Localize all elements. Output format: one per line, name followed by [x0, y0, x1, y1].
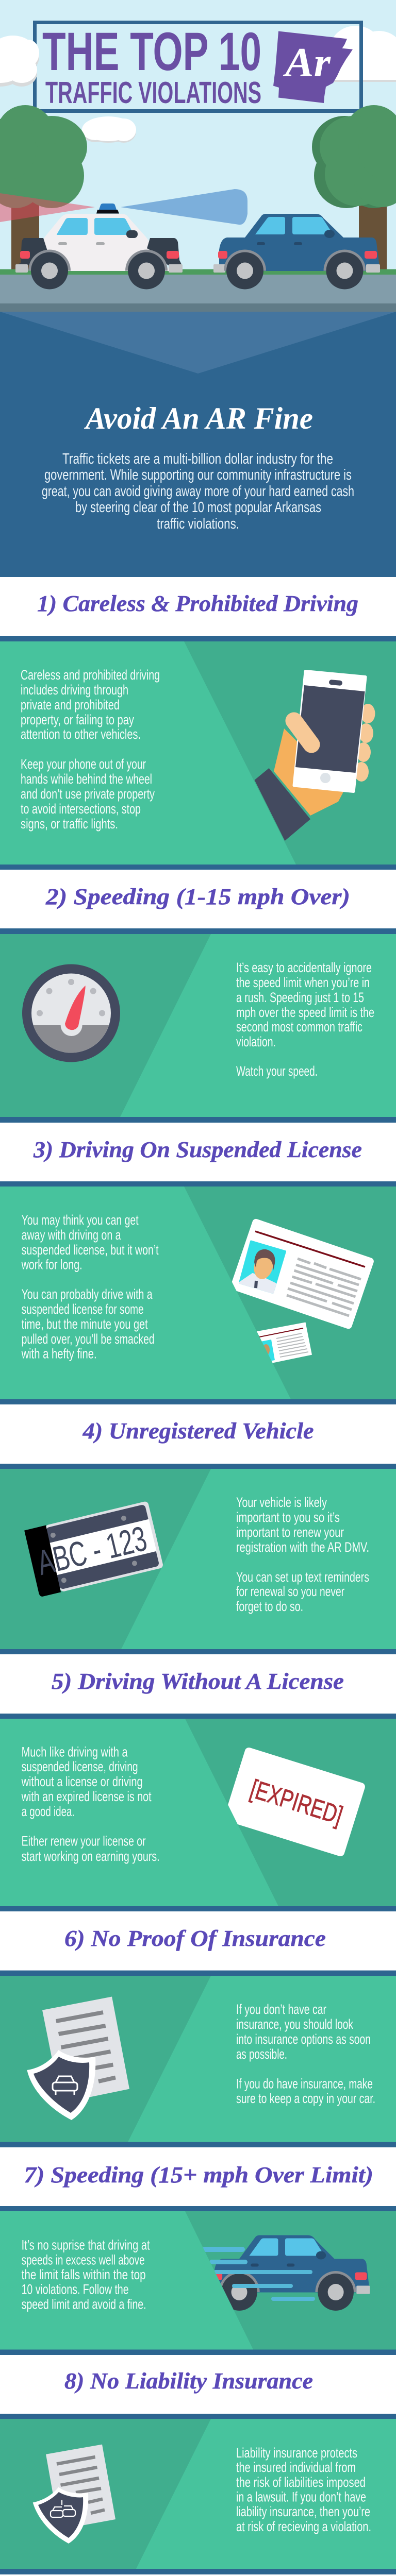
text: violation 5 description	[21, 1744, 160, 1864]
text: violation 5 description: without a license or driving	[21, 1774, 143, 1789]
speed lines	[202, 2247, 315, 2301]
intro heading: Avoid An AR Fine	[84, 401, 313, 435]
text: violation 7 description: the limit falls within the top	[22, 2267, 146, 2282]
cloud: left	[0, 36, 39, 87]
text: violation 8 description	[236, 2445, 371, 2534]
heading: 4 unregistered vehicle: 4) Unregistered Vehicle	[82, 1418, 314, 1444]
text: violation 1 description: property, or failing to pay	[21, 712, 134, 727]
heading: 8 no liability insurance: 8) No Liability Insurance	[64, 2368, 313, 2394]
siren	[96, 204, 119, 213]
text: violation 7 description	[22, 2237, 150, 2312]
icon: license plate BC-123	[24, 1501, 163, 1597]
icon: liability document	[46, 2445, 116, 2530]
text: violation 1 description: and don’t use private property	[21, 786, 155, 802]
text: violation 3 description: pulled over, you’ll be smacked	[22, 1331, 155, 1347]
text: violation 3 description: with a hefty fine.	[21, 1346, 97, 1361]
text: violation 2 description: violation.	[236, 1034, 276, 1049]
title line: the top 10: THE TOP 10	[42, 22, 261, 82]
text: violation 5 description: start working on earning yours.	[22, 1849, 160, 1864]
text: violation 6 description: as possible.	[236, 2046, 287, 2062]
heading: 2 speeding 1-15 mph over: 2) Speeding (1-15 mph Over)	[45, 884, 350, 909]
heading: 1 careless and prohibited driving: 1) Careless & Prohibited Driving	[37, 591, 358, 616]
state abbreviation: Ar	[283, 40, 331, 86]
text: violation 7 description: speeds in excess well above	[22, 2252, 145, 2268]
expired stamp text: [EXPIRED]	[247, 1774, 346, 1830]
text: violation 3 description: suspended license, but it won’t	[22, 1242, 159, 1258]
panel: violation 1	[0, 636, 396, 870]
text: violation 1 description: includes driving through	[21, 682, 128, 698]
heading: 5 driving without a license: 5) Driving Without A License	[52, 1669, 344, 1694]
text: violation 1 description: attention to other vehicles.	[21, 726, 141, 742]
ground: grass, road and curb	[0, 269, 396, 312]
text: violation 4 description: important to you so it’s	[236, 1510, 340, 1525]
light beam: red	[0, 193, 95, 222]
icon: shield with car crash	[33, 2487, 88, 2544]
icon: Arkansas state outline	[273, 31, 353, 103]
text: violation 7 description: 10 violations. Follow the	[22, 2282, 129, 2297]
panel: violation 8	[0, 2414, 396, 2574]
text: violation 4 description: Your vehicle is likely	[236, 1495, 327, 1510]
text: violation 1 description: signs, or traffic lights.	[21, 816, 118, 832]
cloud: small center	[82, 116, 136, 143]
heading: 7 speeding 15+ mph over limit: 7) Speeding (15+ mph Over Limit)	[24, 2162, 373, 2188]
text: violation 5 description: Either renew your license or	[22, 1833, 146, 1849]
subtitle: traffic violations: TRAFFIC VIOLATIONS	[45, 76, 261, 110]
text: violation 1 description: hands while behind the wheel	[21, 771, 152, 787]
text: violation 4 description: for renewal so you never	[236, 1584, 344, 1599]
icon: license plate BC-123: ABC - 123	[34, 1519, 151, 1583]
panel: violation 2	[0, 928, 396, 1123]
text: violation 4 description: important to renew your	[236, 1524, 344, 1540]
icon: speedometer	[22, 964, 120, 1062]
text: violation 5 description: with an expired license is not	[21, 1789, 152, 1804]
icon: small driver license	[246, 1322, 312, 1366]
icon: expired card	[223, 1747, 366, 1857]
cloud: right behind title	[308, 26, 396, 82]
text: violation 1 description: Careless and prohibited driving	[21, 667, 160, 683]
intro paragraph: traffic violations.	[157, 516, 239, 532]
text: violation 1 description	[21, 667, 160, 832]
police car	[15, 204, 183, 290]
text: violation 4 description: forget to do so.	[236, 1599, 303, 1614]
panel: hero street scene	[0, 0, 396, 312]
panel: violation 7	[0, 2206, 396, 2355]
heading: 6 no proof of insurance: 6) No Proof Of Insurance	[64, 1926, 326, 1951]
panel: violation 6	[0, 1971, 396, 2147]
panel: violation 3	[0, 1181, 396, 1404]
intro paragraph: by steering clear of the 10 most popular Arkansas	[75, 499, 321, 516]
icon: large driver license	[229, 1218, 375, 1330]
text: violation 3 description	[21, 1212, 159, 1361]
text: violation 7 description: It’s no suprise that driving at	[22, 2237, 150, 2252]
text: violation 5 description: suspended license, driving	[22, 1759, 138, 1774]
text: violation 4 description	[236, 1495, 369, 1614]
text: violation 6 description: If you don’t have car	[236, 2002, 326, 2017]
text: violation 2 description	[236, 960, 374, 1079]
text: violation 3 description: suspended license for some	[22, 1301, 144, 1317]
text: violation 1 description: Keep your phone out of your	[21, 756, 146, 772]
icon: speeding car	[202, 2235, 370, 2311]
text: violation 8 description: Liability insurance protects	[236, 2445, 357, 2461]
blue car	[213, 214, 380, 290]
icon: shield with car	[27, 2050, 95, 2120]
text: violation 3 description: You can probably drive with a	[22, 1286, 153, 1302]
panel: violation 4	[0, 1464, 396, 1654]
text: violation 7 description: speed limit and avoid a fine.	[22, 2297, 146, 2312]
icon: insurance document	[42, 1997, 129, 2103]
panel: intro	[0, 312, 396, 577]
text: violation 1 description: to avoid intersections, stop	[21, 801, 141, 817]
heading: 3 driving on suspended license: 3) Driving On Suspended License	[33, 1137, 362, 1162]
tree: left	[0, 105, 87, 269]
text: violation 3 description: time, but the minute you get	[22, 1316, 148, 1332]
text: violation 2 description: Watch your speed.	[236, 1063, 318, 1079]
text: violation 1 description: private and prohibited	[21, 697, 120, 713]
intro paragraph	[42, 451, 354, 532]
text: violation 8 description: the insured individual from	[236, 2460, 356, 2475]
text: violation 6 description	[236, 2002, 375, 2106]
panel: violation 5	[0, 1714, 396, 1911]
text: violation 3 description: work for long.	[21, 1257, 82, 1273]
tree: right	[312, 105, 396, 269]
light beam: blue	[121, 189, 248, 225]
title frame	[35, 22, 361, 111]
text: violation 3 description: You may think you can get	[22, 1212, 139, 1228]
icon: hand holding phone	[255, 671, 375, 841]
text: violation 3 description: away with driving on a	[22, 1227, 121, 1243]
text: violation 5 description: Much like driving with a	[22, 1744, 128, 1760]
text: violation 5 description: a good idea.	[22, 1804, 75, 1819]
